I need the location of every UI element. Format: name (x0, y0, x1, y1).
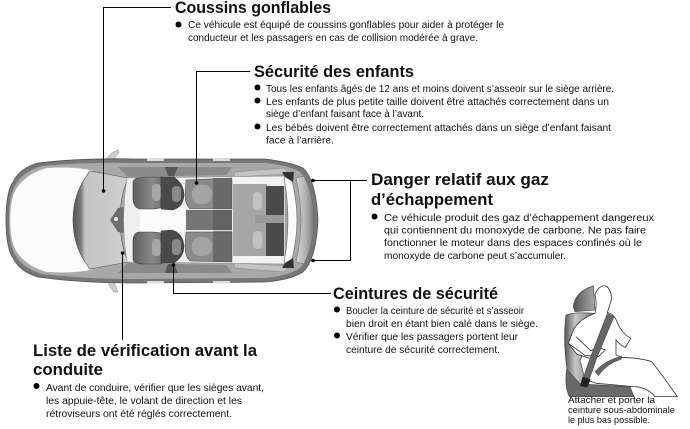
hood (10, 167, 92, 273)
bullet text: danger gaz: monoxyde de carbone peut s’accumuler. (384, 251, 566, 262)
bullet list: sécurité des enfants: Les enfants de plus petite taille doivent être attachés correctement dans un (266, 97, 609, 108)
near arm (568, 337, 605, 357)
bullet text: danger gaz: fonctionner le moteur dans des espaces confinés où le (384, 238, 642, 249)
seat cushion (566, 369, 634, 397)
panel: danger relatif aux gaz d'échappement: d’échappement (371, 191, 494, 209)
bullet list: ceintures de sécurité (334, 306, 538, 356)
roof side rails (118, 167, 232, 177)
panel: danger relatif aux gaz d'échappement (371, 171, 654, 262)
leader line: liste de vérification (121, 251, 124, 340)
body (568, 286, 677, 397)
windshield (73, 171, 128, 269)
bullet list: ceintures de sécurité: Boucler la ceinture de sécurité et s’asseoir (346, 306, 525, 317)
bullet text: liste de vérification (34, 383, 264, 420)
leader line: coussins gonflables (102, 8, 171, 193)
panel: coussins gonflables (175, 0, 504, 44)
heading: ceintures de sécurité: Ceintures de sécurité (333, 285, 498, 303)
bullet list: sécurité des enfants: Les bébés doivent être correctement attachés dans un siège d’enfant faisant (266, 123, 611, 134)
bullet list: ceintures de sécurité: Vérifier que les passagers portent leur (346, 332, 519, 343)
panel: sécurité des enfants (254, 63, 614, 146)
mirrors (105, 150, 119, 166)
illustration: person wearing seat belt (565, 286, 677, 397)
outer body (6, 159, 318, 283)
leader line: ceintures de sécurité (172, 263, 331, 294)
cabin floor (124, 176, 285, 264)
panel: ceintures de sécurité (333, 285, 538, 356)
caption: seat belt: Attacher et porter la (568, 395, 656, 406)
panel: liste de vérification avant la conduite (33, 342, 264, 420)
shoulder belt (583, 313, 614, 379)
caption: seat belt (568, 395, 675, 426)
heading: liste de vérification: Liste de vérification avant la (33, 342, 258, 360)
leader line: danger gaz d'échappement (311, 179, 367, 262)
bullet text: danger gaz (372, 213, 654, 262)
bullet text: coussins gonflables (176, 20, 504, 44)
caption: seat belt: ceinture sous-abdominale (568, 405, 675, 416)
bullet text: liste de vérification: les appuie-tête, le volant de direction et les (46, 396, 242, 407)
heading: danger relatif aux gaz d'échappement: Danger relatif aux gaz (371, 171, 549, 189)
second row seats (185, 178, 232, 209)
bullet list: sécurité des enfants: siège d’enfant faisant face à l’avant. (266, 109, 424, 120)
car top view illustration (6, 150, 318, 292)
bullet text: liste de vérification: Avant de conduire, vérifier que les sièges avant, (46, 383, 264, 394)
bullet text: liste de vérification: rétroviseurs ont été réglés correctement. (46, 409, 232, 420)
bullet text: coussins gonflables: Ce véhicule est équipé de coussins gonflables pour aider à protéger le (188, 20, 504, 31)
third row and cargo (233, 184, 267, 256)
bullet text: danger gaz: Ce véhicule produit des gaz d’échappement dangereux (384, 213, 654, 224)
mirror housing at windshield (110, 207, 124, 233)
bullet text: coussins gonflables: conducteur et les passagers en cas de collision modérée à grave. (188, 33, 478, 44)
leader line: sécurité des enfants (195, 72, 250, 185)
bullet list: sécurité des enfants: Tous les enfants âgés de 12 ans et moins doivent s’asseoir sur le siège arrière. (266, 84, 614, 95)
headrest (573, 286, 595, 312)
bullet text: danger gaz: qui contiennent du monoxyde de carbone. Ne pas faire (384, 226, 646, 236)
bullet list: ceintures de sécurité: bien droit en étant bien calé dans le siège. (346, 319, 538, 330)
caption: seat belt: le plus bas possible. (568, 415, 650, 426)
rear window (284, 176, 297, 264)
bullet list: ceintures de sécurité: ceinture de sécurité correctement. (346, 345, 500, 356)
bullet list: sécurité des enfants: face à l’arrière. (266, 136, 334, 146)
buckle (580, 377, 591, 387)
lap belt (595, 356, 622, 376)
front seats (133, 177, 166, 209)
bullet list: sécurité des enfants (254, 84, 614, 146)
panel: liste de vérification avant la conduite: conduite (33, 361, 103, 379)
heading: sécurité des enfants: Sécurité des enfants (254, 63, 414, 81)
seat back (565, 313, 595, 387)
